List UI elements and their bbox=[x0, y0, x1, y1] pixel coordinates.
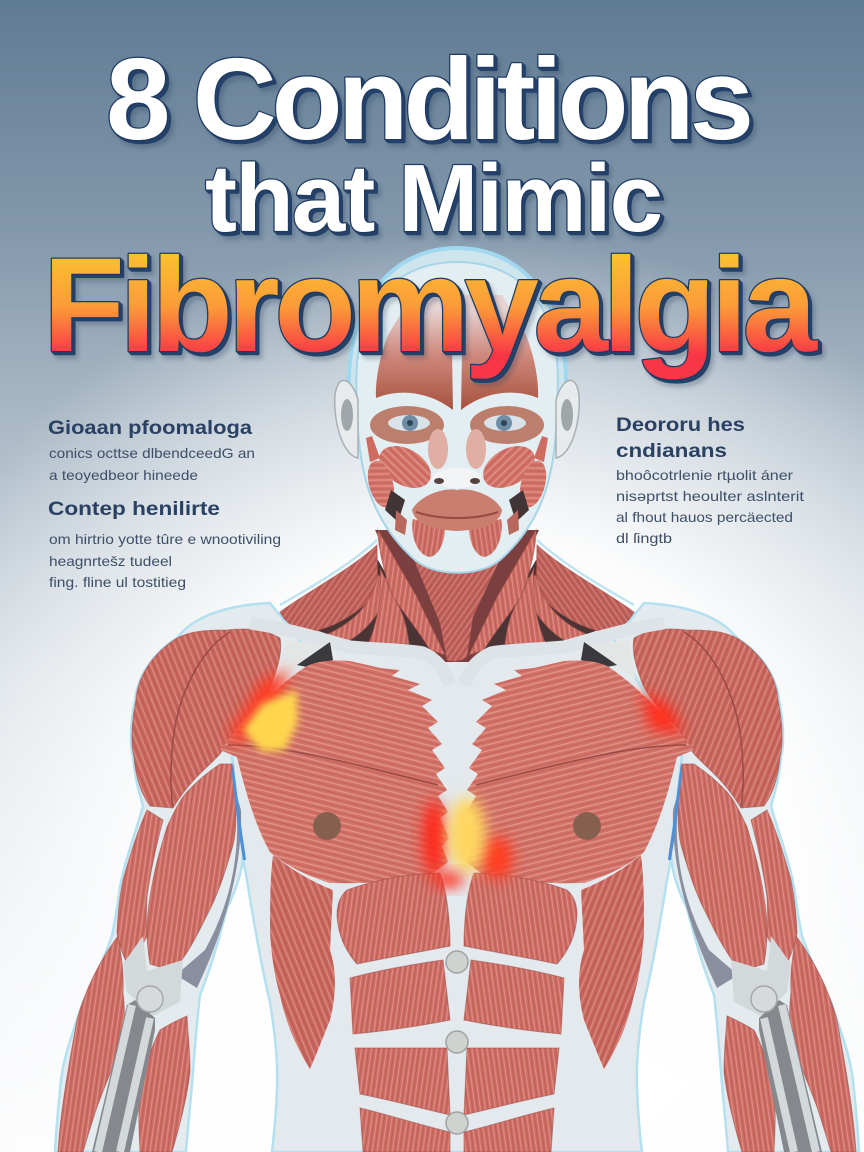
heading: Deororu hes cndianans: Deororu hes bbox=[616, 415, 745, 436]
abdominal tendon nodes bbox=[446, 951, 468, 1134]
body paragraph two: om hirtrio yotte tûre e wnootiviling bbox=[49, 531, 281, 547]
left text block bbox=[48, 418, 281, 590]
head bbox=[356, 262, 558, 573]
lips and mouth muscle bbox=[412, 489, 502, 531]
left side of face bbox=[335, 295, 453, 557]
title line: that Mimic: that Mimic bbox=[205, 145, 663, 252]
left neck and collar bbox=[250, 530, 450, 685]
body paragraph two: heagnrtešz tudeel bbox=[49, 553, 172, 569]
right text block bbox=[616, 415, 804, 546]
heading: Gioaan pfoomaloga: Gioaan pfoomaloga bbox=[48, 418, 252, 439]
nose bbox=[433, 468, 481, 488]
body paragraph: dl ſingtb bbox=[616, 530, 672, 546]
pain glow: left shoulder bbox=[228, 670, 298, 752]
neck underlay bbox=[375, 530, 539, 662]
anatomical figure bbox=[55, 248, 859, 1152]
torso silhouette bbox=[232, 610, 682, 1152]
pain glow: sternum bbox=[422, 797, 513, 888]
heading: Contep henilirte: Contep henilirte bbox=[48, 499, 220, 520]
title bbox=[43, 34, 818, 380]
right chest and abdominals bbox=[464, 661, 694, 1152]
body paragraph: al fhout hauos percäected bbox=[616, 509, 793, 525]
right arm bbox=[614, 603, 859, 1152]
heading: Deororu hes cndianans: cndianans bbox=[616, 441, 727, 462]
body paragraph one: a teoyedbeor hineede bbox=[49, 467, 198, 483]
body paragraph one: conics octtse dlbendceedG an bbox=[49, 445, 255, 461]
left chest and abdominals bbox=[220, 661, 450, 1152]
pain glow: right shoulder bbox=[640, 690, 685, 735]
left arm bbox=[55, 603, 300, 1152]
head halo bbox=[349, 248, 566, 410]
title line: Fibromyalgia: Fibromyalgia bbox=[43, 231, 818, 380]
body paragraph: bhoôcotrlenie rtµolit áner bbox=[616, 467, 793, 483]
central neck muscle bbox=[412, 555, 502, 661]
title line: 8 Conditions: 8 Conditions bbox=[106, 34, 754, 164]
right neck and collar bbox=[464, 530, 664, 685]
body paragraph: nisəprtst heoulter aslnterit bbox=[616, 488, 804, 504]
right side of face bbox=[461, 295, 579, 557]
body paragraph two: fing. fline ul tostitieg bbox=[49, 574, 186, 590]
